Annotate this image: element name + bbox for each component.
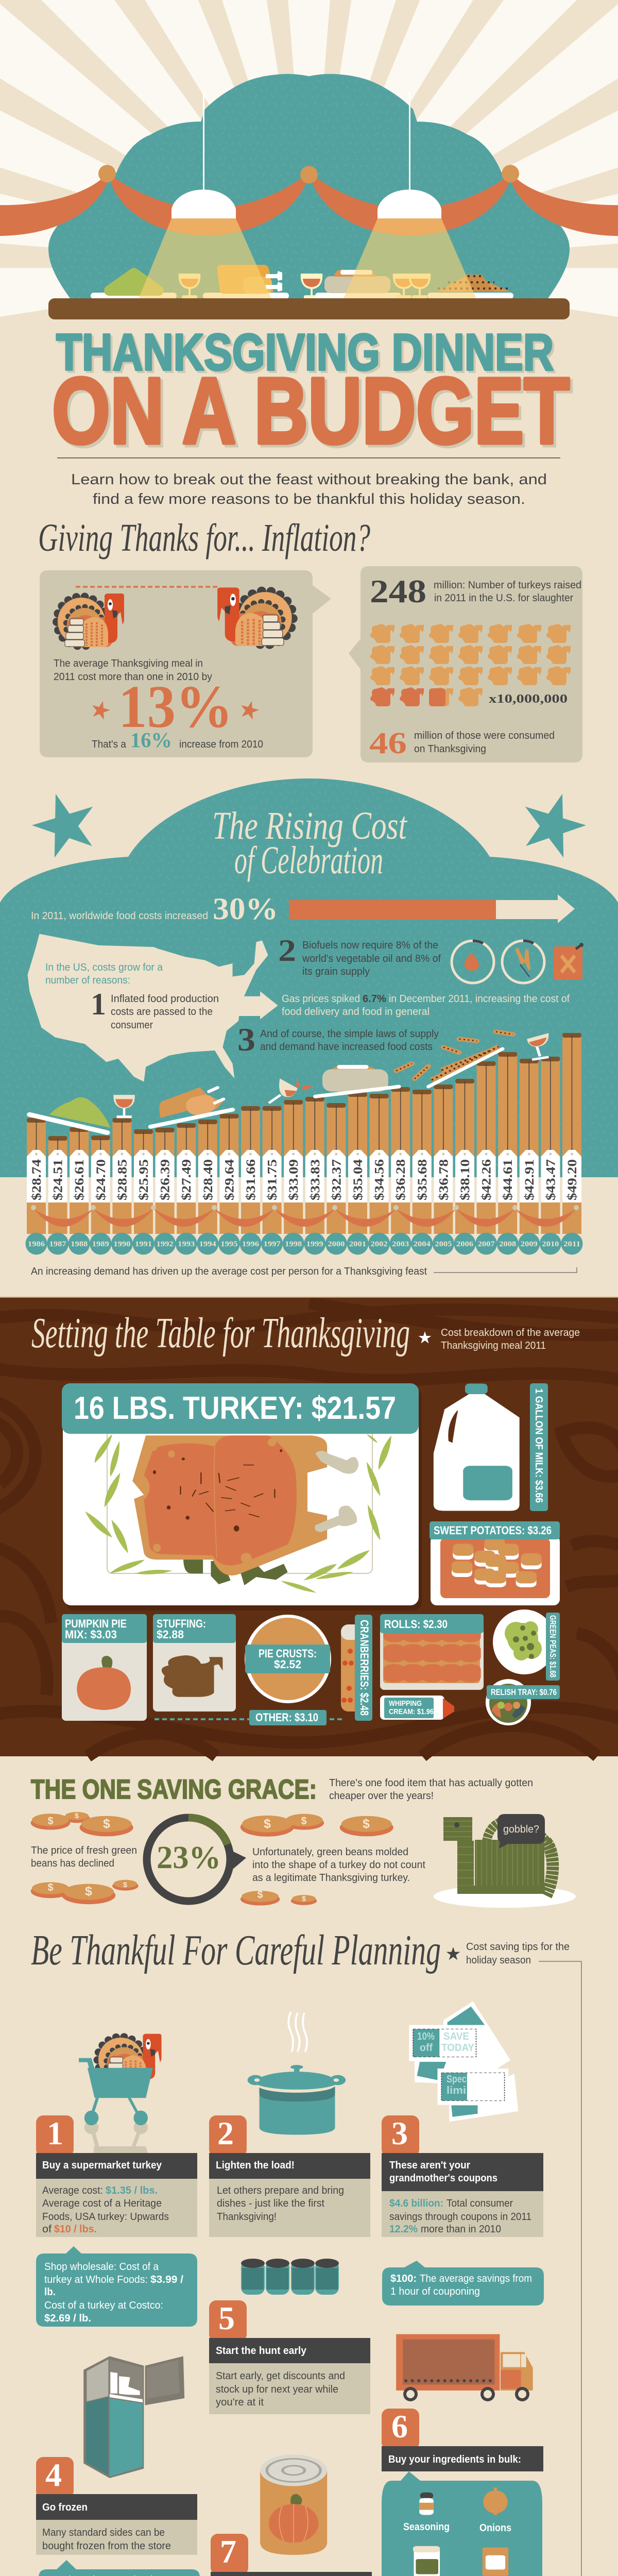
star left [25, 785, 104, 861]
tip 1: supermarket turkey: Average cost of a Heritage [42, 2198, 162, 2209]
bar 1993: 1993 [178, 1240, 195, 1248]
bar 1997: 1997 [264, 1240, 281, 1248]
table [48, 298, 570, 319]
tip 2: lighten the load: Let others prepare and bring [217, 2185, 344, 2196]
bar 2010 [540, 1057, 561, 1255]
bar 1994: 1994 [199, 1240, 216, 1248]
garland knobs [98, 165, 519, 183]
tip 3: coupons: $4.6 billion: [389, 2198, 443, 2209]
green bean text left [31, 1845, 137, 1869]
heading: giving thanks: Giving Thanks for... Inflation? [38, 516, 370, 560]
bar 2008: $44.61 [501, 1159, 515, 1200]
bar 1996: 1996 [242, 1240, 260, 1248]
46 million: 46 [369, 726, 407, 760]
icon: big turkey [217, 587, 293, 646]
intro text: find a few more reasons to be thankful this holiday season. [93, 491, 525, 507]
coins: $ [123, 1880, 127, 1889]
bar 2003: $36.28 [394, 1159, 408, 1200]
lamp right [343, 92, 477, 300]
30 percent stat: In 2011, worldwide food costs increased [31, 910, 208, 922]
bar 1986 [26, 1118, 47, 1255]
heading: the one saving grace [31, 1774, 533, 1805]
callout: shop wholesale: turkey at Whole Foods: [44, 2274, 148, 2285]
panel: turkeys raised [349, 566, 582, 762]
panel: rising cost of celebration [0, 778, 618, 1177]
bar 1989: 1989 [92, 1240, 109, 1248]
bar 1996: $31.66 [244, 1159, 258, 1200]
bar 2004 [411, 1090, 433, 1255]
bar 1991: 1991 [135, 1240, 152, 1248]
46 million: on Thanksgiving [414, 743, 486, 755]
reason 3 [237, 1021, 439, 1058]
heading: be thankful: Be Thankful For Careful Planning [31, 1926, 441, 1974]
bar 2007: $42.26 [480, 1159, 494, 1200]
bar 1992: $26.39 [159, 1159, 173, 1200]
bar 2001: $35.04 [351, 1159, 365, 1200]
card: relish tray [486, 1679, 560, 1725]
card: pie crusts [245, 1615, 331, 1703]
tip 3: coupons: savings through coupons in 2011 [389, 2211, 531, 2223]
bar 2005 [433, 1084, 454, 1255]
heading: be thankful: Cost saving tips for the [466, 1941, 570, 1953]
callout: shop wholesale: $3.99 / [150, 2274, 183, 2285]
icon: coupons [409, 2001, 518, 2122]
reason 2: Biofuels now require 8% of the [302, 940, 438, 951]
turkey price label [62, 1383, 419, 1434]
icon: sweet potatoes: SWEET POTATOES: $3.26 [434, 1524, 552, 1537]
gas prices text: Gas prices spiked [282, 993, 360, 1005]
green bean text left: beans has declined [31, 1858, 114, 1869]
title [52, 324, 572, 466]
heading: the one saving grace: There's one food item that has actually gotten [329, 1777, 533, 1789]
donut chart: 23 percent [147, 1818, 246, 1901]
tip 7: canned pumpkin [211, 2533, 372, 2576]
bar 2010: 2010 [542, 1240, 559, 1248]
heading: the one saving grace: cheaper over the years! [329, 1790, 434, 1802]
bar 1990 [111, 1118, 133, 1255]
intro text [71, 471, 547, 507]
callout: shop wholesale: $2.69 / lb. [44, 2313, 91, 2324]
panel: average meal cost [40, 570, 331, 757]
coins: $ [47, 1882, 54, 1893]
tip 6: buy in bulk [382, 2408, 543, 2576]
tip 5: start the hunt early: stock up for next year while [216, 2384, 338, 2395]
speech bubble: gobble? [503, 1824, 539, 1835]
heading: setting the table: Setting the Table for Thanksgiving [31, 1309, 410, 1357]
reason 3: and demand have increased food costs [260, 1041, 433, 1053]
tip 1: supermarket turkey: Average cost: [42, 2185, 103, 2196]
icon: milk jug: 1 GALLON OF MILK: $3.66 [533, 1388, 544, 1503]
chart caption: An increasing demand has driven up the average cost per person for a Thanksgiving feast [31, 1266, 427, 1277]
bar 2006: $38.10 [458, 1159, 472, 1200]
tip 1: supermarket turkey: Foods, USA turkey: Upwards [42, 2211, 169, 2223]
bar 1995: $29.64 [222, 1159, 236, 1200]
gas prices text: food delivery and food in general [282, 1006, 430, 1018]
dashed height line [76, 586, 219, 588]
callout: frozen peas [39, 2560, 200, 2576]
meal cost text: The average Thanksgiving meal in [54, 658, 203, 669]
tip 5: start the hunt early [209, 2300, 370, 2414]
heading: setting the table: Thanksgiving meal 2011 [441, 1340, 546, 1351]
bar 1995 [218, 1114, 240, 1255]
card: rolls [380, 1614, 484, 1690]
other cost label [154, 1710, 344, 1725]
map reasons: number of reasons: [45, 975, 130, 986]
bar 1991: $25.95 [137, 1159, 151, 1200]
map reasons: In the US, costs grow for a [45, 962, 163, 973]
46 million [369, 726, 555, 760]
callout: coupon savings: The average savings from [420, 2273, 532, 2284]
bar 1993 [176, 1123, 197, 1255]
tip 1: supermarket turkey: 1 [47, 2115, 63, 2151]
icon: grain ring [502, 941, 544, 983]
card: cranberries [341, 1615, 372, 1721]
tip 2: lighten the load: Lighten the load! [216, 2160, 295, 2171]
card: turkey platter [62, 1383, 422, 1611]
icon: coupons: limi [447, 2085, 466, 2096]
icon: green bean turkey [434, 1814, 576, 1908]
bar 2006 [454, 1079, 476, 1255]
bar 1989 [90, 1136, 111, 1255]
bar 2004: 2004 [414, 1240, 431, 1248]
panel: bulk ingredients: Seasoning [403, 2521, 450, 2533]
tip 5: start the hunt early: you're at it [216, 2397, 264, 2408]
bar 1988: $26.61 [73, 1159, 87, 1200]
icon: jerry can [554, 943, 583, 980]
icon: canned goods [241, 2259, 339, 2295]
callout: coupon savings: $100: [390, 2273, 417, 2284]
card: whipping cream [380, 1696, 454, 1720]
reason 2 [278, 934, 441, 977]
tip 1: supermarket turkey: $10 / lbs. [54, 2224, 97, 2235]
callout: shop wholesale [36, 2246, 197, 2327]
icon: coupons: off [420, 2042, 433, 2054]
card: stuffing: STUFFING: [157, 1617, 206, 1630]
tip 4: go frozen: 4 [45, 2456, 62, 2493]
reason 2: its grain supply [302, 966, 370, 977]
meal cost text: 2011 cost more than one in 2010 by [54, 671, 212, 683]
icon: coupons: Spec [447, 2074, 467, 2085]
tip 3: coupons: 3 [391, 2115, 408, 2151]
bar 2009 [518, 1059, 540, 1255]
bar 2002: 2002 [371, 1240, 388, 1248]
bar 1998: $33.09 [287, 1159, 301, 1200]
map reasons: 1 [91, 987, 106, 1021]
bar 2009: $42.91 [523, 1159, 537, 1200]
bar 1988 [68, 1127, 90, 1255]
panel: setting the table wood [0, 1297, 618, 1756]
lamp left [138, 92, 272, 300]
card: cranberries: CRANBERRIES: $2.48 [358, 1620, 371, 1716]
card: pumpkin pie mix: MIX: $3.03 [65, 1628, 117, 1641]
garland swags [0, 176, 618, 236]
hero illustration [0, 0, 618, 319]
16 percent line [92, 728, 263, 752]
coins: $ [103, 1817, 110, 1831]
bar 1998: 1998 [285, 1240, 302, 1248]
card: pumpkin pie mix: PUMPKIN PIE [65, 1617, 127, 1630]
tip 2: lighten the load [209, 2115, 370, 2237]
bar 2000: $32.37 [330, 1159, 344, 1200]
reason 2: 2 [278, 934, 296, 968]
us map [28, 934, 278, 1082]
gas prices text [282, 993, 570, 1018]
card: rolls: ROLLS: $2.30 [384, 1618, 448, 1631]
bar 2008 [497, 1052, 519, 1255]
panel: bulk ingredients: Onions [479, 2522, 511, 2534]
bar 2003: 2003 [392, 1240, 409, 1248]
16 percent line: That's a [92, 739, 127, 750]
green bean text right: as a legitimate Thanksgiving turkey. [252, 1872, 410, 1884]
coins: $ [301, 1816, 307, 1827]
bar 2005: $36.78 [437, 1159, 451, 1200]
coins: $ [363, 1817, 370, 1831]
card: pie crusts: PIE CRUSTS: [259, 1647, 317, 1660]
icon: vegetable oil ring [452, 941, 494, 983]
callout: coupon savings: 1 hour of couponing [390, 2286, 480, 2297]
heading: of Celebration [234, 839, 383, 882]
bar 1992 [154, 1128, 176, 1255]
bar 2001 [347, 1092, 369, 1255]
bar 1993: $27.49 [180, 1159, 194, 1200]
map reasons: consumer [111, 1020, 153, 1031]
multiplier: x10,000,000 [489, 692, 568, 706]
icon: steaming pot [248, 2012, 346, 2135]
callout: shop wholesale: Shop wholesale: Cost of a [44, 2261, 159, 2273]
bar 1994 [197, 1120, 218, 1255]
coins: $ [264, 1817, 271, 1831]
248 million [370, 573, 581, 609]
icon: freezer [83, 2356, 184, 2478]
bar 1987 [47, 1136, 68, 1255]
turkey illustration [85, 1434, 391, 1593]
13 percent: 13% [118, 673, 233, 740]
gas prices text: in December 2011, increasing the cost of [389, 993, 570, 1005]
bar 1996 [240, 1106, 262, 1255]
tip 2: lighten the load: 2 [217, 2115, 234, 2151]
tip 6: buy in bulk: 6 [391, 2408, 408, 2445]
bar 1999 [304, 1097, 325, 1255]
card: green peas [493, 1609, 560, 1681]
tip 3: coupons: more than in 2010 [421, 2224, 501, 2235]
icon: shopping cart with turkey [79, 2034, 162, 2153]
card: whipping cream: CREAM: $1.96 [389, 1707, 434, 1716]
map reasons [45, 962, 219, 1031]
tip 2: lighten the load: Thanksgiving! [217, 2211, 277, 2223]
card: stuffing: $2.88 [157, 1628, 184, 1641]
tip 4: go frozen: Many standard sides can be [42, 2527, 165, 2538]
reason 3: And of course, the simple laws of supply [260, 1028, 439, 1040]
tip 1: supermarket turkey: $1.35 / lbs. [106, 2185, 158, 2196]
green bean text right [252, 1846, 425, 1884]
bar 2007 [475, 1061, 497, 1255]
tip 6: buy in bulk: Buy your ingredients in bulk: [388, 2454, 521, 2465]
card: whipping cream: WHIPPING [389, 1699, 422, 1708]
bar 2001: 2001 [349, 1240, 366, 1248]
bar 1997: $31.75 [266, 1159, 280, 1200]
bar 1997 [261, 1106, 283, 1255]
coins: $ [47, 1816, 54, 1827]
tip 3: coupons [382, 2115, 543, 2237]
bar 1999: 1999 [306, 1240, 323, 1248]
card: pumpkin pie mix [62, 1614, 147, 1721]
bar 1986: $28.74 [30, 1159, 44, 1200]
tip 3: coupons: 12.2% [389, 2224, 418, 2235]
food sliding on the bars [29, 1032, 548, 1132]
heading: The Rising Cost [212, 804, 407, 848]
bar 2003 [390, 1087, 411, 1255]
coins: $ [257, 1889, 263, 1901]
tip 5: start the hunt early: Start early, get discounts and [216, 2370, 345, 2382]
green bean text right: Unfortunately, green beans molded [252, 1846, 408, 1858]
tip 3: coupons: These aren't your [389, 2160, 470, 2171]
bar 2011: 2011 [563, 1240, 580, 1248]
star right [514, 785, 593, 861]
16 percent line: increase from 2010 [179, 739, 263, 750]
tip 1: supermarket turkey: Buy a supermarket turkey [42, 2160, 162, 2171]
icon: small turkey [57, 594, 124, 647]
callout: shop wholesale: Cost of a turkey at Costco: [44, 2300, 163, 2311]
bar 2007: 2007 [478, 1240, 495, 1248]
other cost label: OTHER: $3.10 [255, 1711, 318, 1724]
table food [91, 265, 513, 299]
tip 5: start the hunt early: 5 [218, 2300, 235, 2336]
icon: coupons: 10% [417, 2031, 435, 2042]
heading: the one saving grace: THE ONE SAVING GRACE: [31, 1774, 317, 1805]
callout: shop wholesale: lb. [44, 2286, 56, 2298]
heading [212, 804, 407, 882]
panel: bulk ingredients [382, 2471, 542, 2576]
card: green peas: GREEN PEAS: $1.68 [548, 1615, 558, 1677]
icon: pumpkin can [260, 2454, 327, 2555]
icon: delivery truck [396, 2334, 533, 2401]
speech bubble [497, 1814, 545, 1849]
callout: coupon savings [382, 2261, 544, 2306]
bar 1987: 1987 [49, 1240, 66, 1248]
bar 2005: 2005 [435, 1240, 452, 1248]
bar 1992: 1992 [157, 1240, 174, 1248]
bar 1986: 1986 [28, 1240, 45, 1248]
heading: setting the table: Cost breakdown of the average [441, 1327, 580, 1338]
icon: sweet potatoes [430, 1521, 560, 1605]
tip 1: supermarket turkey: of [42, 2224, 52, 2235]
coins: $ [85, 1884, 92, 1899]
coins: $ [302, 1894, 306, 1903]
bar chart: cost per person 1986-2011 [26, 1032, 583, 1255]
bar 1995: 1995 [220, 1240, 237, 1248]
map reasons: Inflated food production [111, 993, 219, 1005]
248 million: 248 [370, 573, 426, 609]
bar 1990: $28.85 [115, 1159, 129, 1200]
bar 2006: 2006 [456, 1240, 474, 1248]
bar 2000 [325, 1103, 347, 1255]
bar 2004: $35.68 [416, 1159, 430, 1200]
turkey price label: 16 LBS. TURKEY: $21.57 [74, 1391, 396, 1426]
tip 5: start the hunt early: Start the hunt early [216, 2345, 307, 2357]
bar 2011 [561, 1033, 583, 1255]
bar 1988: 1988 [71, 1240, 88, 1248]
bar 1989: $24.70 [94, 1159, 108, 1200]
bar garlands [31, 1205, 579, 1227]
reason 2: world's vegetable oil and 8% of [302, 953, 441, 964]
30 percent stat: 30% [213, 892, 278, 926]
tip 1: supermarket turkey [36, 2115, 197, 2237]
intro text: Learn how to break out the feast without breaking the bank, and [71, 471, 547, 488]
bar 2002 [368, 1094, 390, 1255]
coins [31, 1811, 393, 1906]
bar 1990: 1990 [113, 1240, 130, 1248]
tip 3: coupons: Total consumer [447, 2198, 513, 2209]
bar 2011: $49.20 [565, 1159, 579, 1200]
card: pie crusts: $2.52 [274, 1658, 301, 1671]
progress arrow [289, 894, 575, 923]
bar 2009: 2009 [521, 1240, 538, 1248]
tip 4: go frozen: bought frozen from the store [42, 2540, 171, 2552]
icon: coupons: SAVE [443, 2031, 469, 2042]
gas prices text: 6.7% [363, 993, 386, 1005]
green bean text right: into the shape of a turkey do not count [252, 1859, 425, 1871]
meal cost text [54, 658, 212, 683]
bar 1991 [133, 1129, 154, 1255]
coins: $ [75, 1811, 79, 1820]
pictogram: turkey rows [370, 624, 571, 706]
248 million: in 2011 in the U.S. for slaughter [434, 592, 573, 604]
reason 3: 3 [237, 1021, 255, 1058]
heading: be thankful [31, 1926, 581, 2576]
card: relish tray: RELISH TRAY: $0.76 [491, 1687, 557, 1697]
bar 1994: $28.40 [201, 1159, 215, 1200]
heading: be thankful: holiday season [466, 1955, 531, 1966]
green bean text left: The price of fresh green [31, 1845, 137, 1856]
bar 1999: $33.83 [308, 1159, 322, 1200]
card: stuffing [153, 1614, 236, 1711]
248 million: million: Number of turkeys raised [434, 580, 581, 591]
tip 7: canned pumpkin: 7 [220, 2533, 236, 2570]
bar 1998 [283, 1100, 304, 1255]
tip 4: go frozen [36, 2456, 197, 2555]
16 percent line: 16% [130, 728, 172, 752]
46 million: million of those were consumed [414, 730, 555, 741]
icon: coupons: TODAY [441, 2042, 475, 2054]
bar 2010: $43.47 [544, 1159, 558, 1200]
donut chart: 23 percent: 23% [157, 1840, 221, 1875]
bar 2008: 2008 [499, 1240, 516, 1248]
bar 1987: $24.51 [52, 1159, 65, 1200]
tip 2: lighten the load: dishes - just like the first [217, 2198, 324, 2209]
bar 2002: $34.56 [373, 1159, 387, 1200]
map reasons: costs are passed to the [111, 1006, 213, 1018]
bar 2000: 2000 [328, 1240, 345, 1248]
tip 4: go frozen: Go frozen [42, 2502, 88, 2513]
30 percent stat [31, 892, 278, 926]
icon: milk jug [434, 1383, 548, 1511]
tip 3: coupons: grandmother's coupons [389, 2173, 497, 2184]
